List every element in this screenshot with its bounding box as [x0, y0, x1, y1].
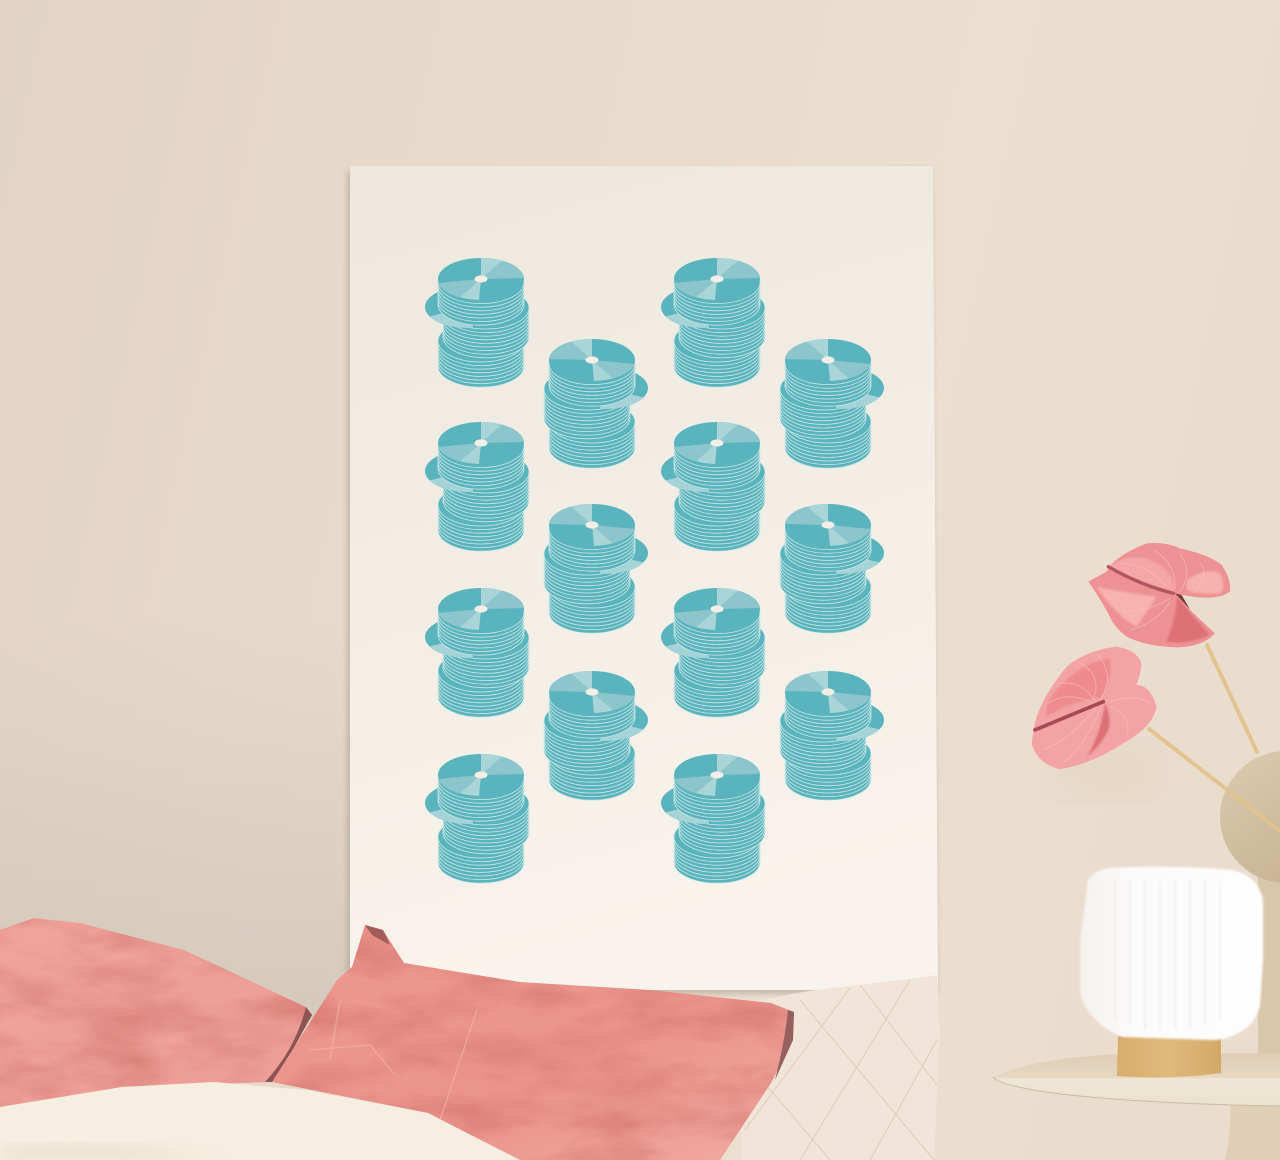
disc stack row 3 column 2: [544, 671, 654, 800]
disc stack row 3 column 1: [419, 588, 529, 717]
disc stack row 1 column 1: [419, 258, 529, 387]
disc stack row 4 column 3: [655, 754, 765, 883]
lamp: [1080, 867, 1263, 1077]
disc stack row 3 column 3: [655, 588, 765, 717]
cream diamond cushion: [741, 975, 940, 1160]
anthurium flower lower: [1032, 647, 1157, 769]
vase: [1220, 751, 1280, 1058]
flower stems: [1149, 645, 1280, 831]
disc stack row 1 column 3: [655, 258, 765, 387]
side table: [993, 1053, 1280, 1160]
white knit pillow: [0, 1082, 520, 1160]
disc stack row 3 column 4: [780, 671, 890, 800]
disc stack row 1 column 4: [780, 339, 890, 468]
poster: [347, 166, 938, 994]
anthurium flower upper: [1088, 543, 1230, 647]
disc stack row 1 column 2: [544, 339, 654, 468]
plant shadow on wall: [1050, 742, 1170, 798]
disc stack row 2 column 1: [419, 422, 529, 551]
disc stack row 2 column 4: [780, 504, 890, 633]
disc stack row 2 column 3: [655, 422, 765, 551]
pink pillow left: [0, 918, 312, 1110]
lamp shade: [1080, 867, 1263, 1040]
disc stack row 4 column 1: [419, 754, 529, 883]
lamp base: [1117, 1036, 1221, 1077]
pink pillow centre: [272, 925, 794, 1160]
disc stack row 2 column 2: [544, 504, 654, 633]
